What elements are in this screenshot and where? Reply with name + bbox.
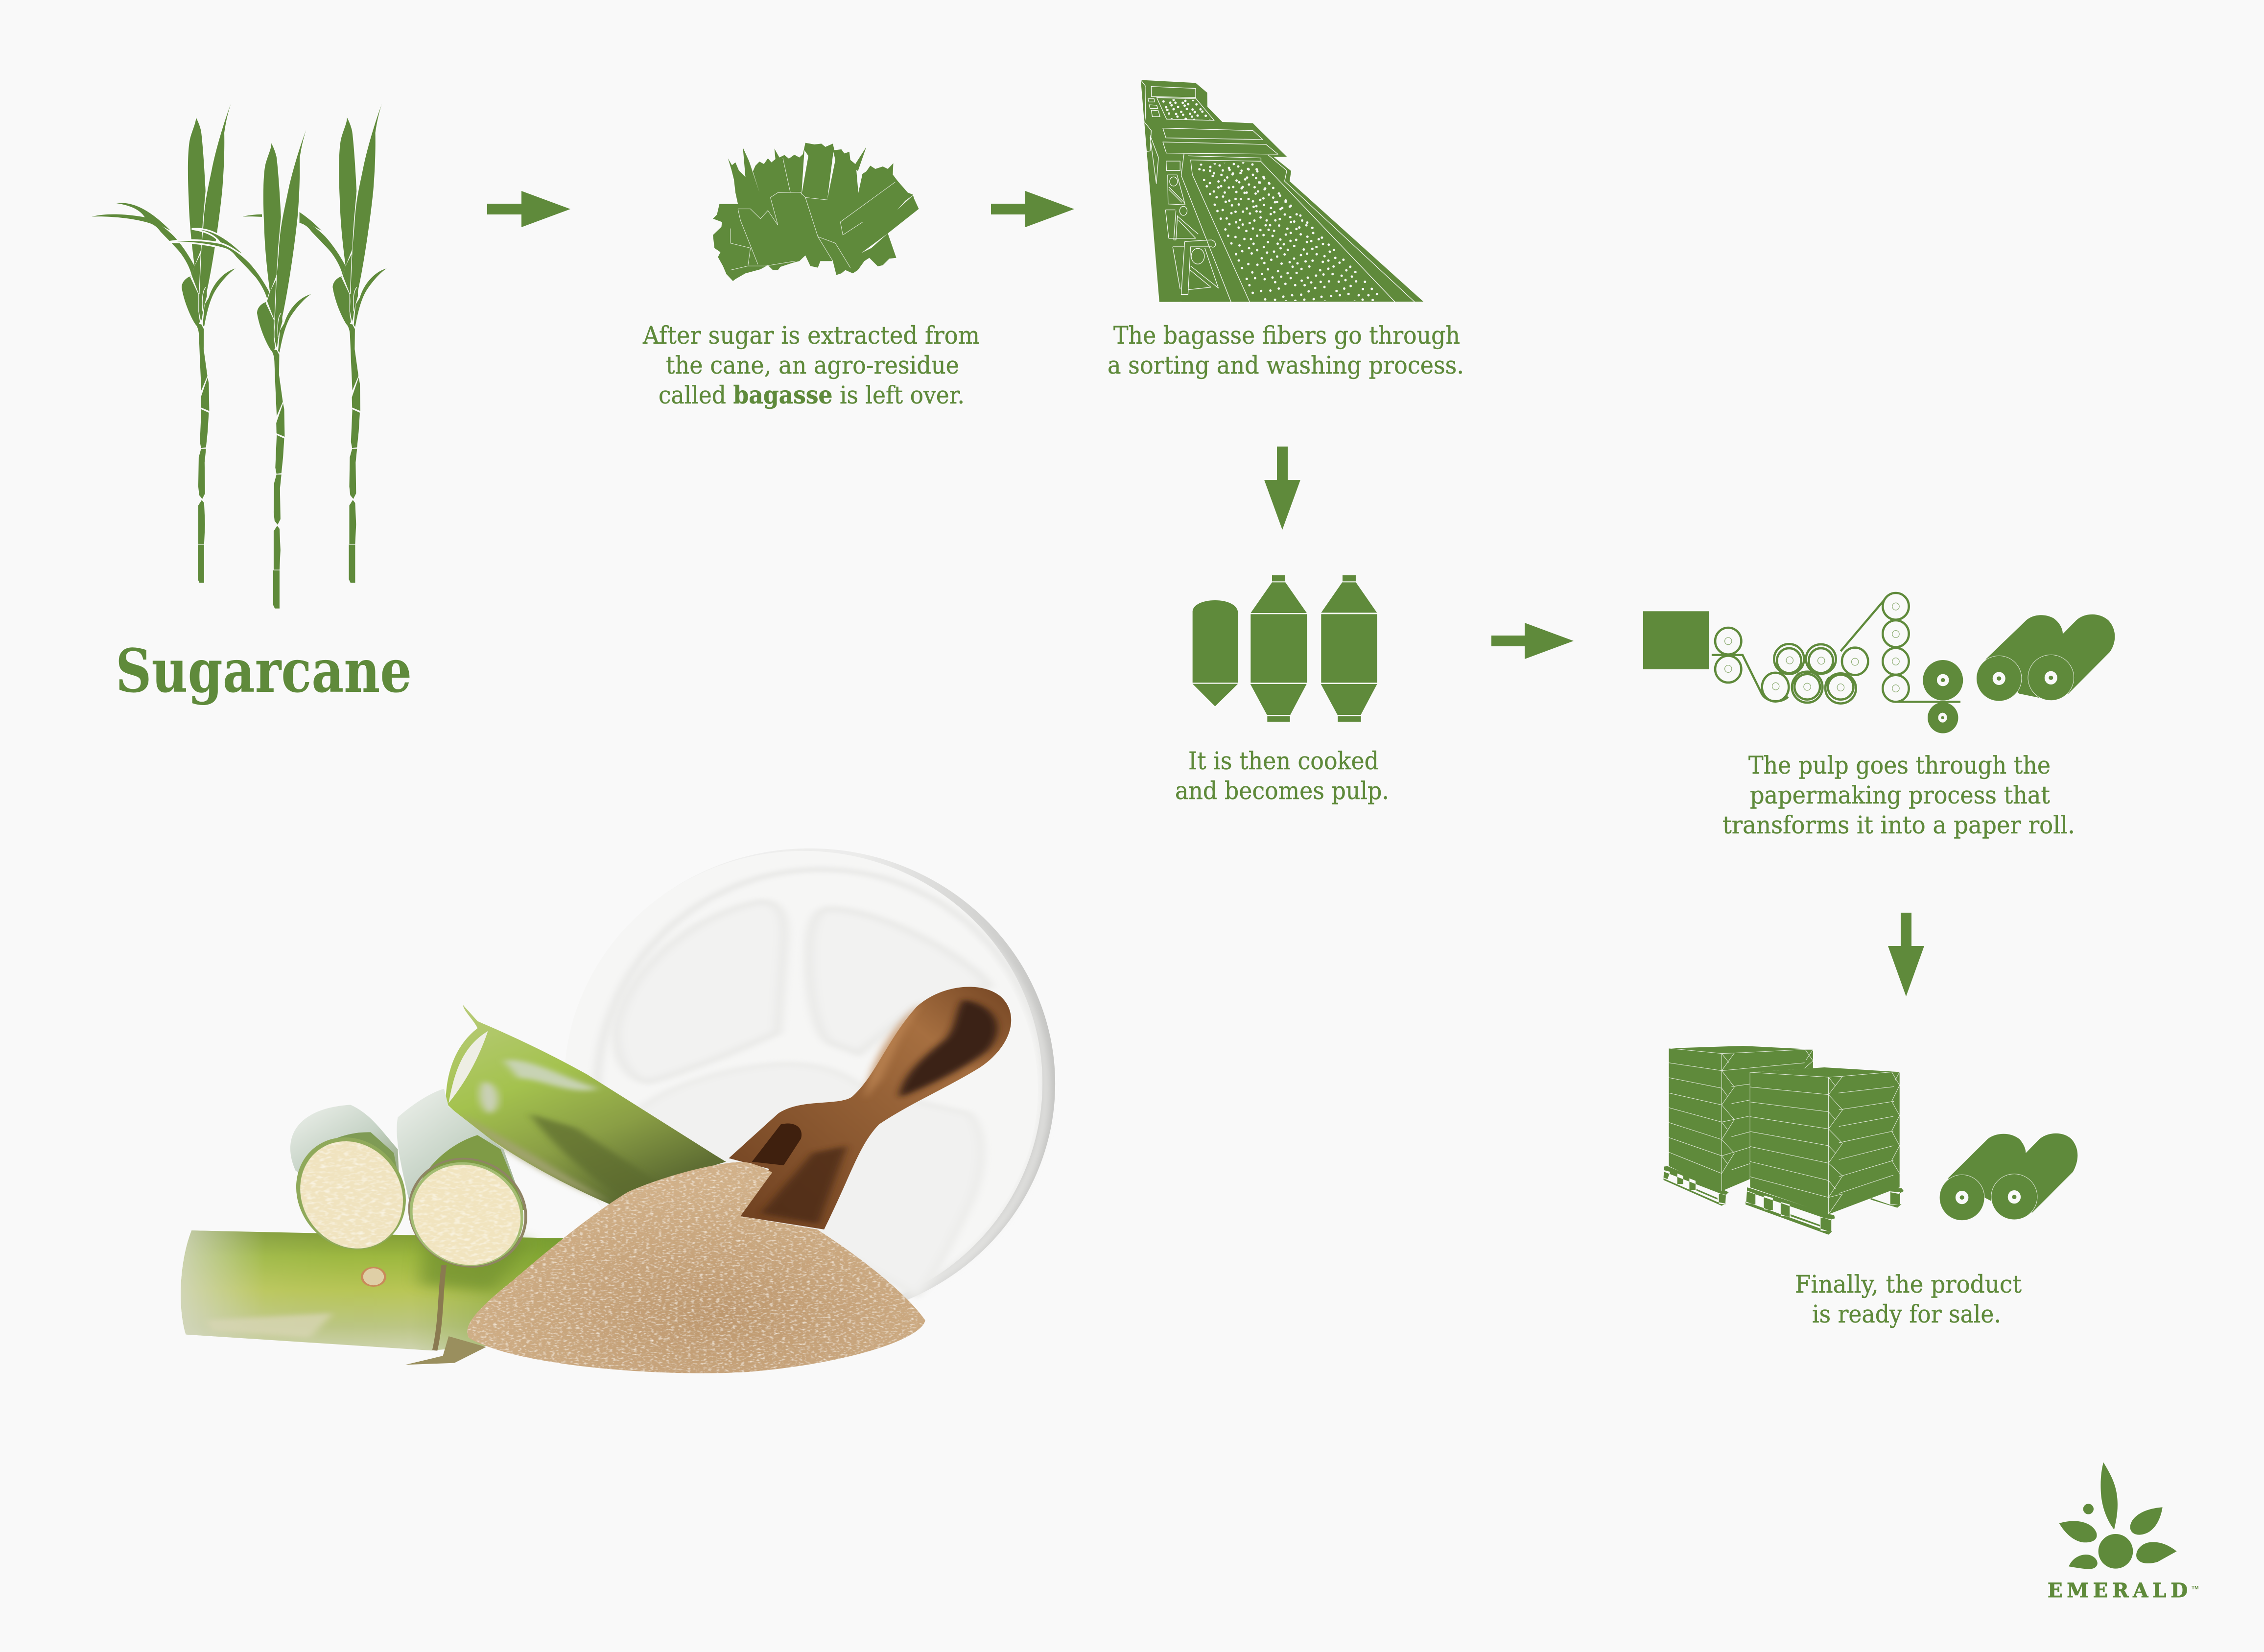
plant: left sugarcane: [92, 104, 236, 583]
photo: brown sugar mound: [467, 1162, 925, 1373]
arrow: washing to cooking: [1264, 447, 1300, 530]
text: washing caption: The bagasse fibers go through: [1113, 321, 1460, 350]
text: sale caption: Finally, the product: [1795, 1270, 2022, 1298]
paper belt: [1712, 601, 1960, 702]
photo: compartment plate: [564, 849, 1055, 1319]
pulp tank: [1643, 611, 1709, 669]
icon: pallets and paper rolls ready for sale: [1664, 1046, 2077, 1235]
text: cooking caption: It is then cooked: [1188, 747, 1379, 775]
photo: cut cane segment middle: [397, 1089, 533, 1270]
photo: wooden scoop: [729, 987, 1011, 1229]
photo collage: cane, sugar, scoop and plate: [181, 849, 1055, 1373]
text: bagasse caption: called bagasse is left over.: [659, 380, 965, 409]
icon: pulp digester tanks: [1193, 575, 1377, 722]
text: papermaking caption: papermaking process that: [1750, 781, 2050, 809]
icon: three sugarcane plants: [92, 104, 386, 609]
text: papermaking caption: [1722, 751, 2075, 839]
text: sale caption: [1795, 1270, 2022, 1328]
arrow: cooking to papermaking: [1491, 623, 1574, 659]
logo: Emerald: [2048, 1463, 2198, 1602]
text: bagasse caption: After sugar is extracted from: [642, 321, 980, 350]
arrow: papermaking to sale: [1888, 913, 1924, 996]
photo: long bottom cane: [181, 1230, 564, 1365]
title: Sugarcane: Sugarcane: [116, 636, 412, 706]
trademark: TM: [2192, 1585, 2198, 1591]
text: washing caption: [1108, 321, 1464, 379]
pallet stack: back: [1664, 1046, 1813, 1206]
logo mark: leaves and circle: [2059, 1463, 2177, 1569]
pellets on the conveyor: [1162, 98, 1386, 304]
text: washing caption: a sorting and washing process.: [1108, 351, 1464, 379]
text: bagasse caption: the cane, an agro-residue: [666, 351, 959, 379]
icon: bagasse fibers: [713, 143, 919, 281]
plant: right sugarcane: [243, 104, 386, 583]
icon: papermaking machine: [1643, 593, 2115, 733]
text: bagasse caption: [642, 321, 980, 409]
paper rolls: [1939, 1133, 2077, 1221]
plant: middle sugarcane: [167, 130, 311, 609]
text: papermaking caption: transforms it into a paper roll.: [1722, 811, 2075, 839]
text: cooking caption: [1175, 747, 1389, 805]
icon: sorting and washing conveyor: [1141, 80, 1423, 304]
paper rolls: [1977, 614, 2115, 701]
text: sale caption: is ready for sale.: [1812, 1300, 2001, 1328]
text: cooking caption: and becomes pulp.: [1175, 777, 1389, 805]
photo: cut cane segment left: [287, 1105, 415, 1253]
rollers: [1715, 593, 1909, 704]
pallet stack: front: [1745, 1067, 1904, 1235]
arrow: plant to bagasse: [487, 191, 570, 227]
text: papermaking caption: The pulp goes through the: [1748, 751, 2051, 779]
finished calender rollers: [1923, 660, 1963, 733]
photo: upper cane piece: [446, 1005, 726, 1204]
logo wordmark: EMERALD: [2048, 1579, 2188, 1602]
arrow: bagasse to washing: [991, 191, 1074, 227]
